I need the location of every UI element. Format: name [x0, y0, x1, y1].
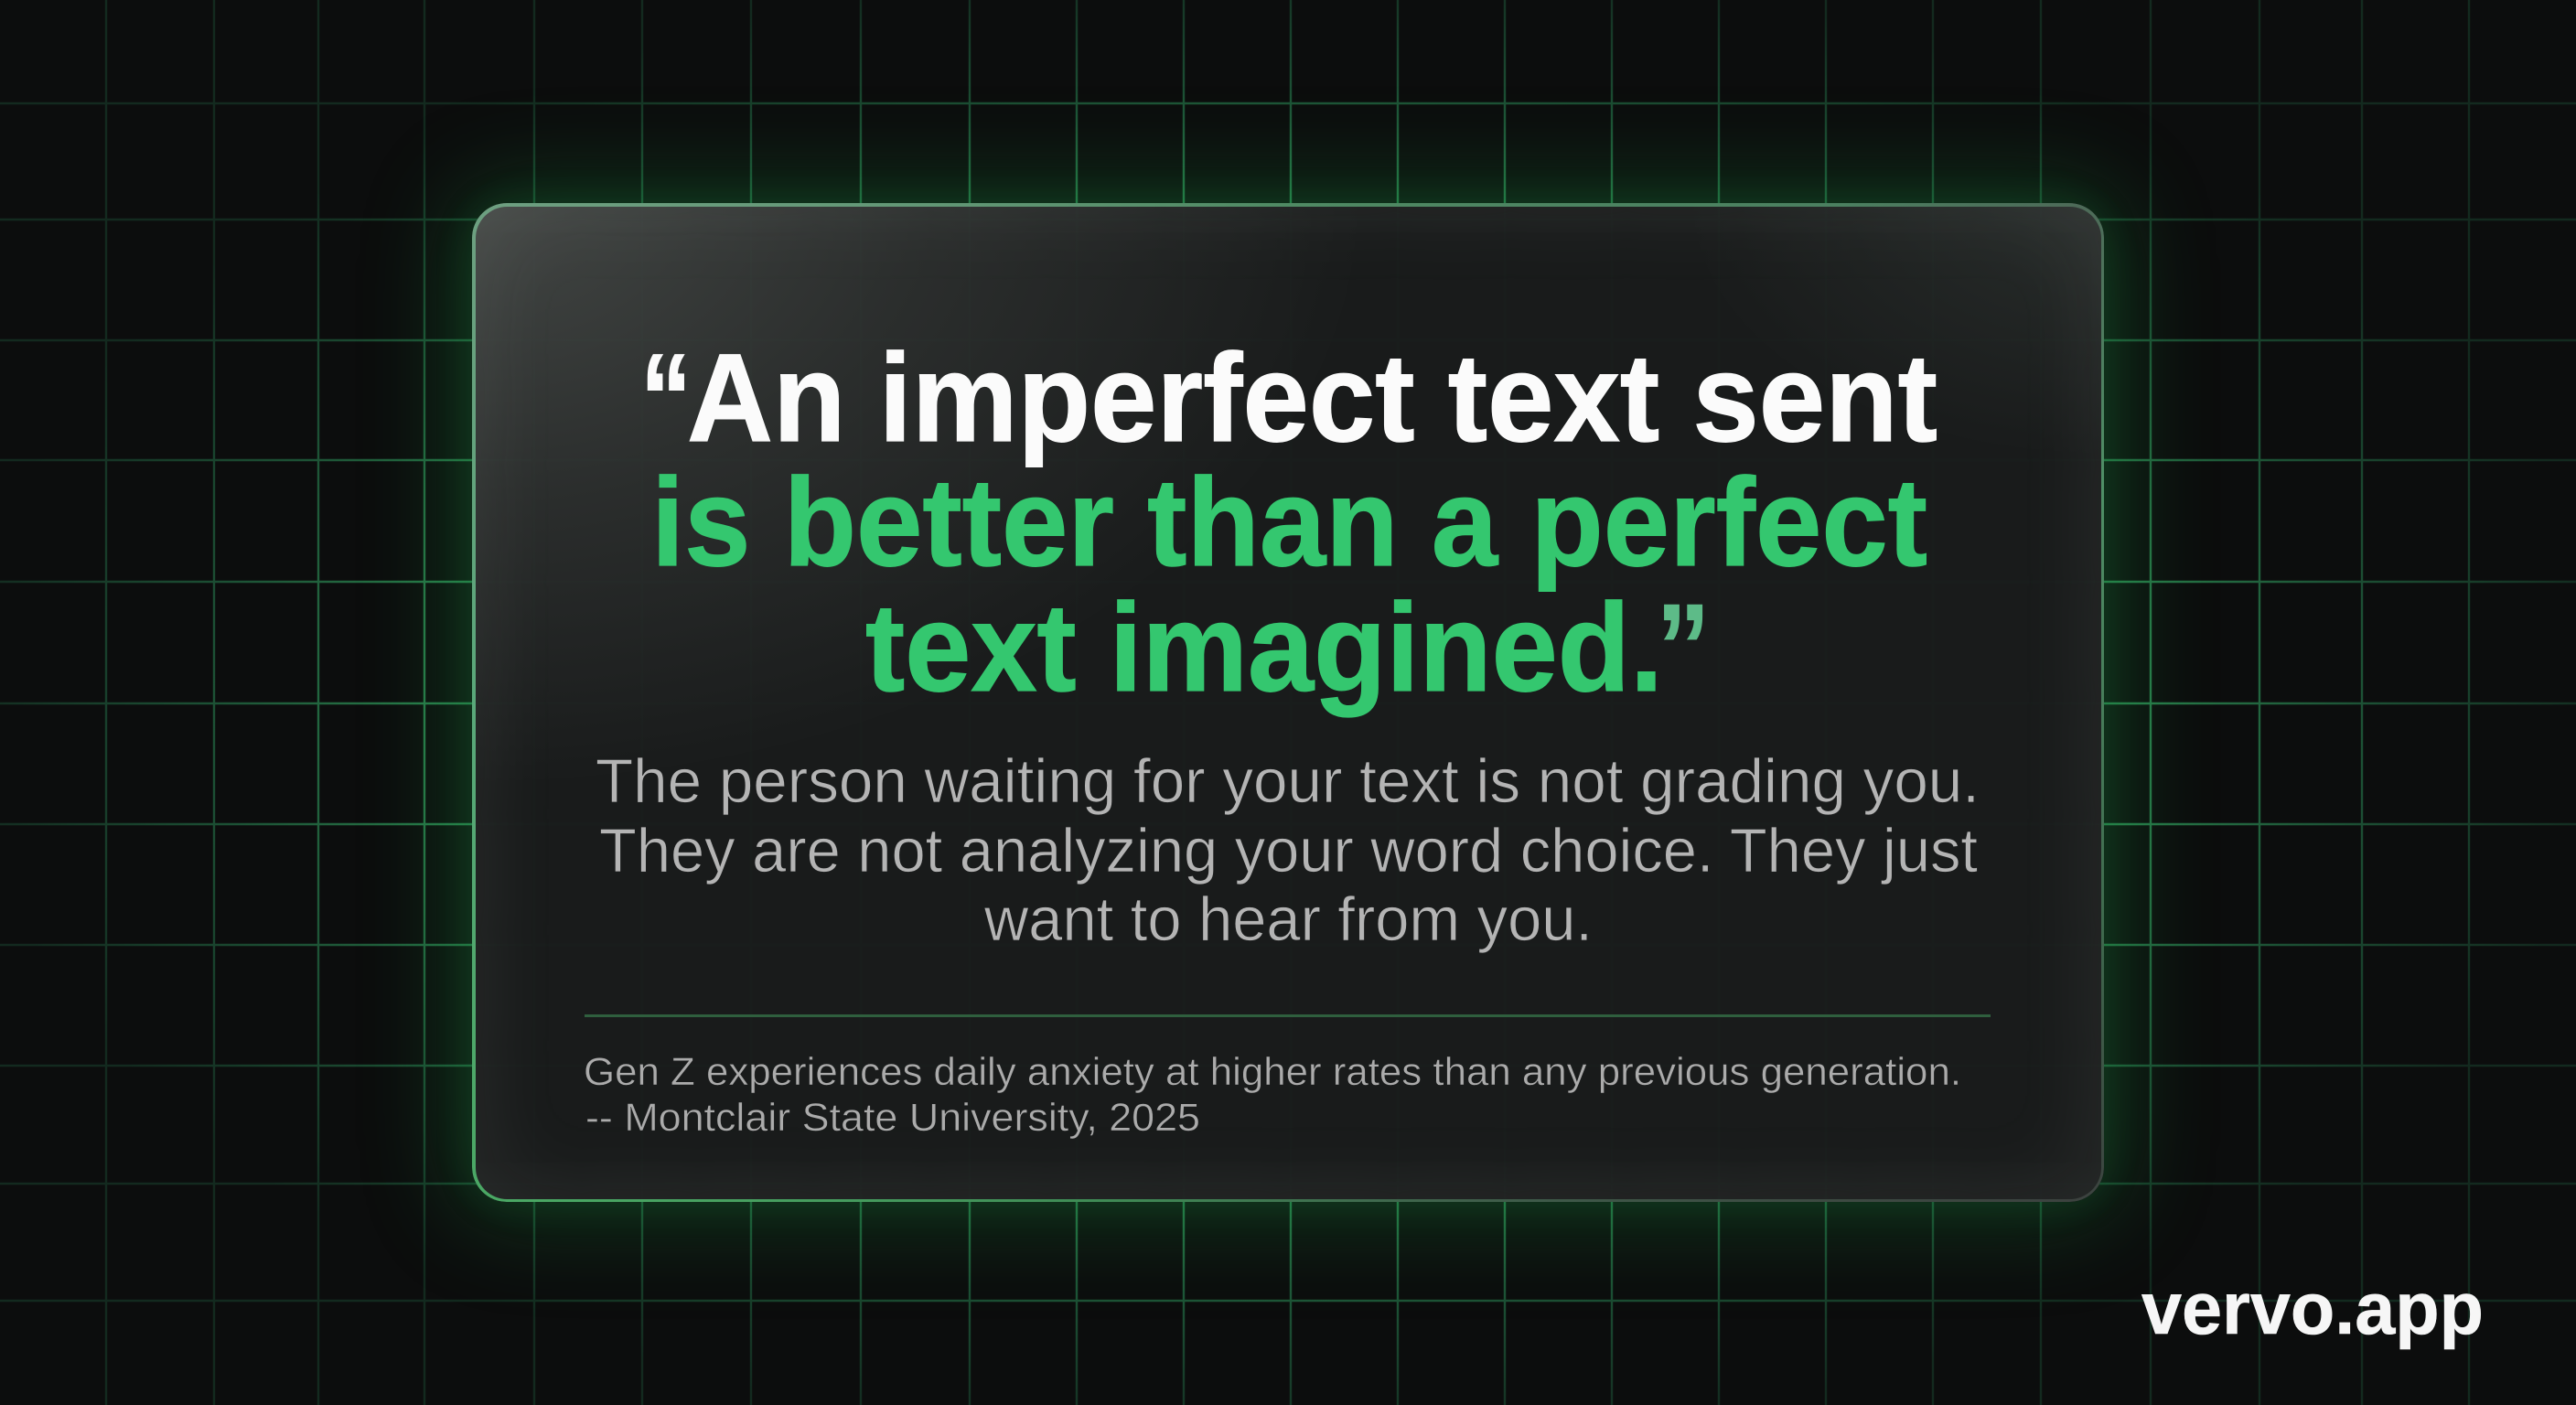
citation line 1: Gen Z experiences daily anxiety at higher rates than any previous generation. — [584, 1050, 1961, 1094]
body text — [596, 746, 1980, 954]
heading line 3: ” — [1656, 578, 1711, 718]
brand: vervo.app: vervo.app — [2141, 1268, 2484, 1350]
body line 3: want to hear from you. — [983, 885, 1593, 954]
heading line 1: An imperfect text sent — [687, 328, 1937, 468]
heading line 1: “ — [640, 328, 692, 468]
heading: quote — [640, 328, 1937, 718]
panel: quote card — [472, 203, 2104, 1202]
source citation — [584, 1050, 1961, 1140]
divider — [585, 1014, 1991, 1017]
body line 2: They are not analyzing your word choice. They just — [599, 816, 1978, 885]
heading line 2: is better than a perfect — [651, 453, 1927, 593]
citation line 2: -- Montclair State University, 2025 — [585, 1096, 1200, 1140]
heading line 3: text imagined. — [865, 578, 1663, 718]
body line 1: The person waiting for your text is not grading you. — [596, 746, 1980, 816]
